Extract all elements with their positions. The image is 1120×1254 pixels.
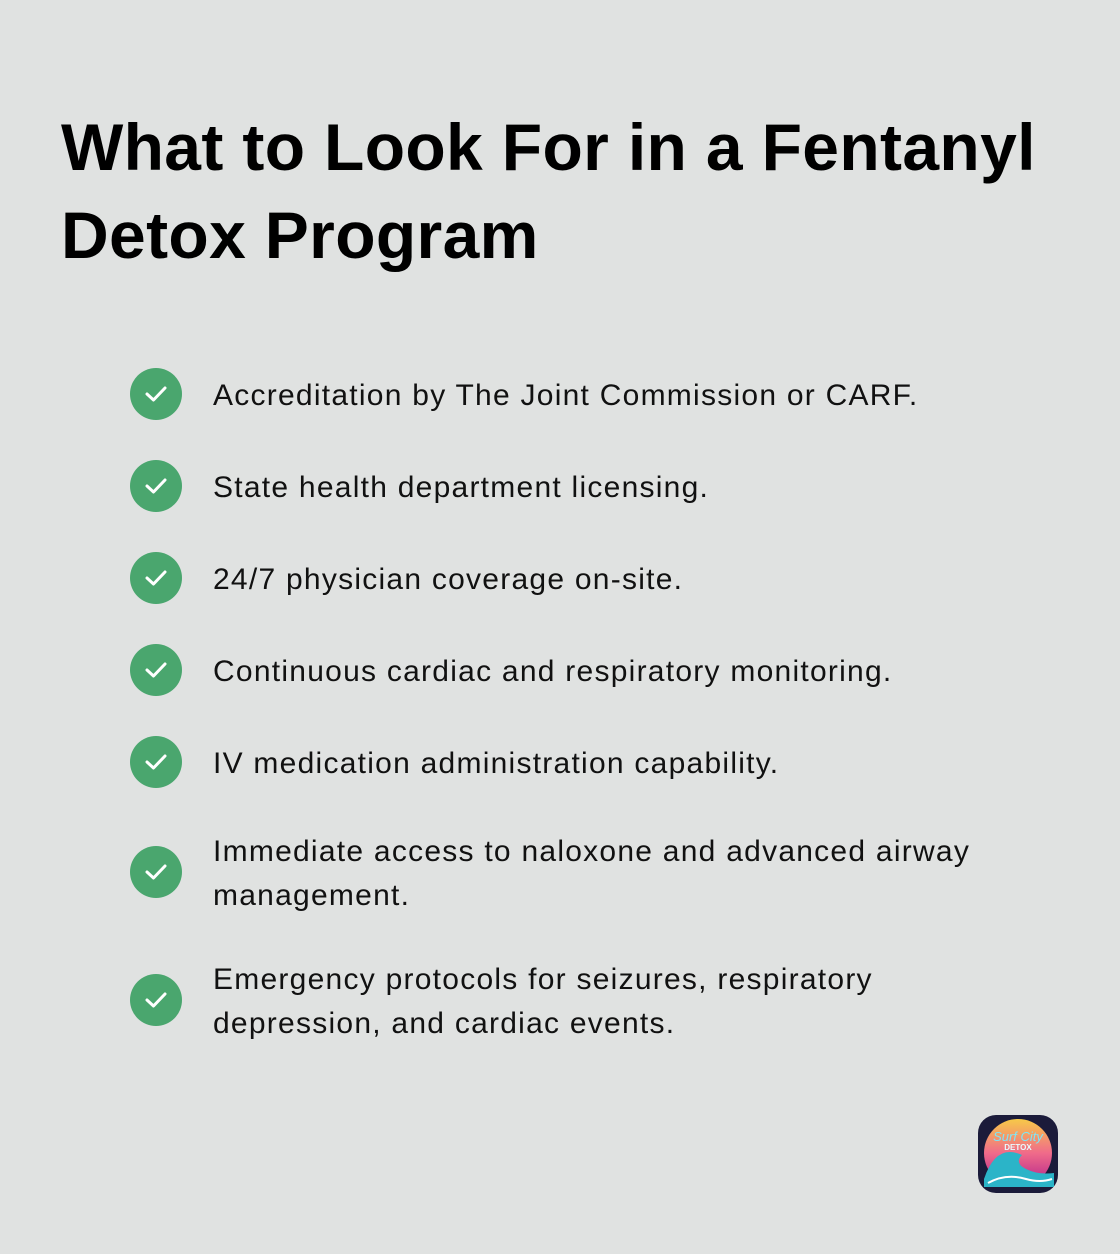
title <box>61 110 1036 272</box>
item 4 <box>130 644 892 696</box>
text <box>213 835 970 912</box>
item 5 <box>130 736 779 788</box>
text: Emergency protocols for seizures, respiratory <box>213 963 873 996</box>
text: State health department licensing. <box>213 471 709 504</box>
logo: DETOX <box>1004 1143 1032 1152</box>
icon: check <box>130 846 182 898</box>
text: management. <box>213 879 410 912</box>
text <box>213 963 873 1040</box>
logo: Surf City <box>993 1129 1044 1144</box>
item 7 <box>130 963 873 1040</box>
icon: check <box>130 460 182 512</box>
text: Continuous cardiac and respiratory monitoring. <box>213 655 892 688</box>
logo <box>978 1115 1058 1193</box>
item 6 <box>130 835 970 912</box>
icon: check <box>130 368 182 420</box>
title: Detox Program <box>61 198 539 272</box>
icon: check <box>130 974 182 1026</box>
text: depression, and cardiac events. <box>213 1007 675 1040</box>
item 1 <box>130 368 919 420</box>
text: 24/7 physician coverage on-site. <box>213 563 683 596</box>
icon: check <box>130 552 182 604</box>
icon: check <box>130 644 182 696</box>
text: Immediate access to naloxone and advanced airway <box>213 835 970 868</box>
title: What to Look For in a Fentanyl <box>61 110 1036 184</box>
text: Accreditation by The Joint Commission or CARF. <box>213 379 919 412</box>
item 3 <box>130 552 683 604</box>
icon: check <box>130 736 182 788</box>
text: IV medication administration capability. <box>213 747 779 780</box>
item 2 <box>130 460 709 512</box>
